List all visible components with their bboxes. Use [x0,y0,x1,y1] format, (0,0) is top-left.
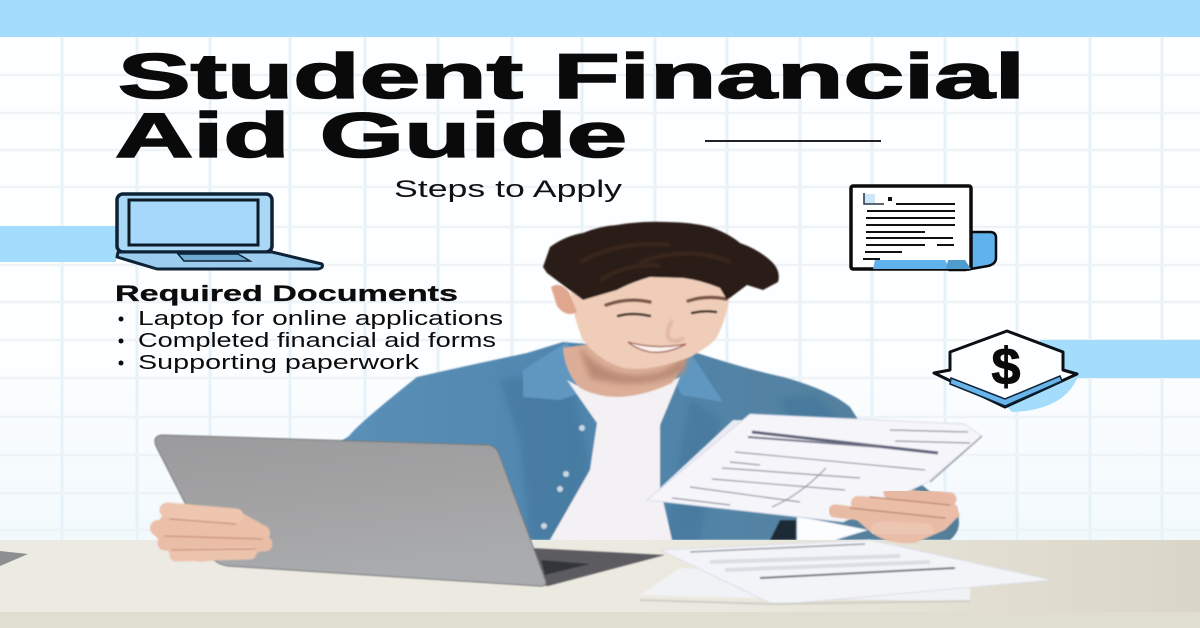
photo: student [190,222,959,540]
left hand gripping laptop [152,503,272,562]
white t-shirt [550,377,680,540]
denim shirt [190,342,959,540]
top blue band [0,0,1200,37]
bullet list: Supporting paperwork [138,352,420,374]
right blue accent band [1040,340,1200,378]
subtitle: steps to apply: Steps to Apply [394,176,622,203]
bullet list: Laptop for online applications [138,308,503,330]
collar [523,342,723,402]
bullet list [118,308,503,374]
icon: dollar badge: $ [992,338,1021,396]
icon: laptop [117,194,322,269]
shirt shading [500,370,850,540]
neck [563,340,690,397]
title rule [705,140,881,142]
papers on desk [640,540,1052,604]
title [115,42,1025,171]
desk [0,540,1200,628]
eyes and brows [606,297,726,316]
icon: dollar badge [934,331,1078,412]
icon: document [851,186,996,270]
white gap beside torso [797,516,868,540]
laptop lid [155,435,546,586]
heading: required documents: Required Documents [115,281,458,306]
hair highlights [580,244,730,280]
right hand palm [840,486,960,543]
forms held in hand [647,414,982,522]
ear [551,285,577,314]
right hand fingers [835,493,952,532]
shirt buttons [541,425,585,529]
under-chin shadow [578,345,690,384]
title: Student Financial [118,42,1025,112]
dark shirt fold [770,520,796,540]
title: Aid Guide [115,101,627,171]
smile [628,342,686,352]
bullet list: Completed financial aid forms [138,330,496,352]
laptop base [500,548,665,586]
laptop [155,435,665,586]
text block: required documents [115,281,503,374]
left blue accent band [0,226,116,262]
nose shadow [668,320,684,341]
hair [543,222,779,300]
face [570,268,730,369]
